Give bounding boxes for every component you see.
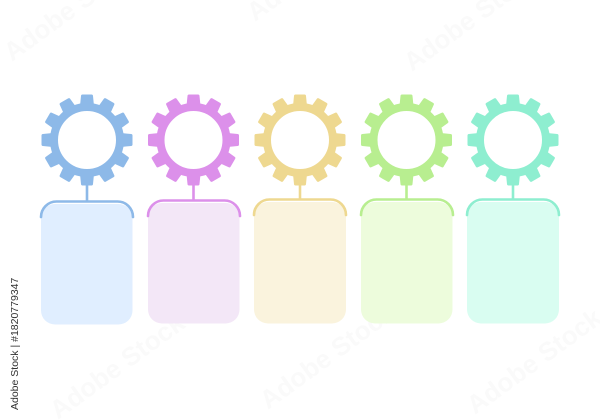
gear 5 [469,96,557,184]
panel body 4 [361,202,452,324]
bracket 4 [361,200,453,215]
gear 4 [362,96,450,184]
stock credit: Adobe Stock | #1820779347 [9,278,21,410]
step 5: teal gear and panel [467,96,559,324]
panel body 5 [467,202,559,324]
panel body 1 [41,204,132,324]
step 4: green gear and panel [361,96,453,324]
connector 2 [192,182,195,200]
step 2: purple gear and panel [148,96,240,324]
connector 4 [405,182,408,200]
gear 2 [150,96,238,184]
panel body 2 [148,203,240,324]
watermarks: Adobe Stock [254,297,401,415]
bracket 2 [148,200,240,216]
gear 3 [256,96,344,184]
connector 3 [299,182,301,200]
panel body 3 [254,202,346,324]
bracket 5 [467,200,559,215]
connector 1 [86,182,88,201]
step 1: blue gear and panel [41,96,133,324]
connector 5 [512,182,514,200]
gear 1 [43,96,131,184]
step 3: yellow gear and panel [254,96,346,324]
bracket 3 [254,200,346,215]
bracket 1 [41,202,133,217]
